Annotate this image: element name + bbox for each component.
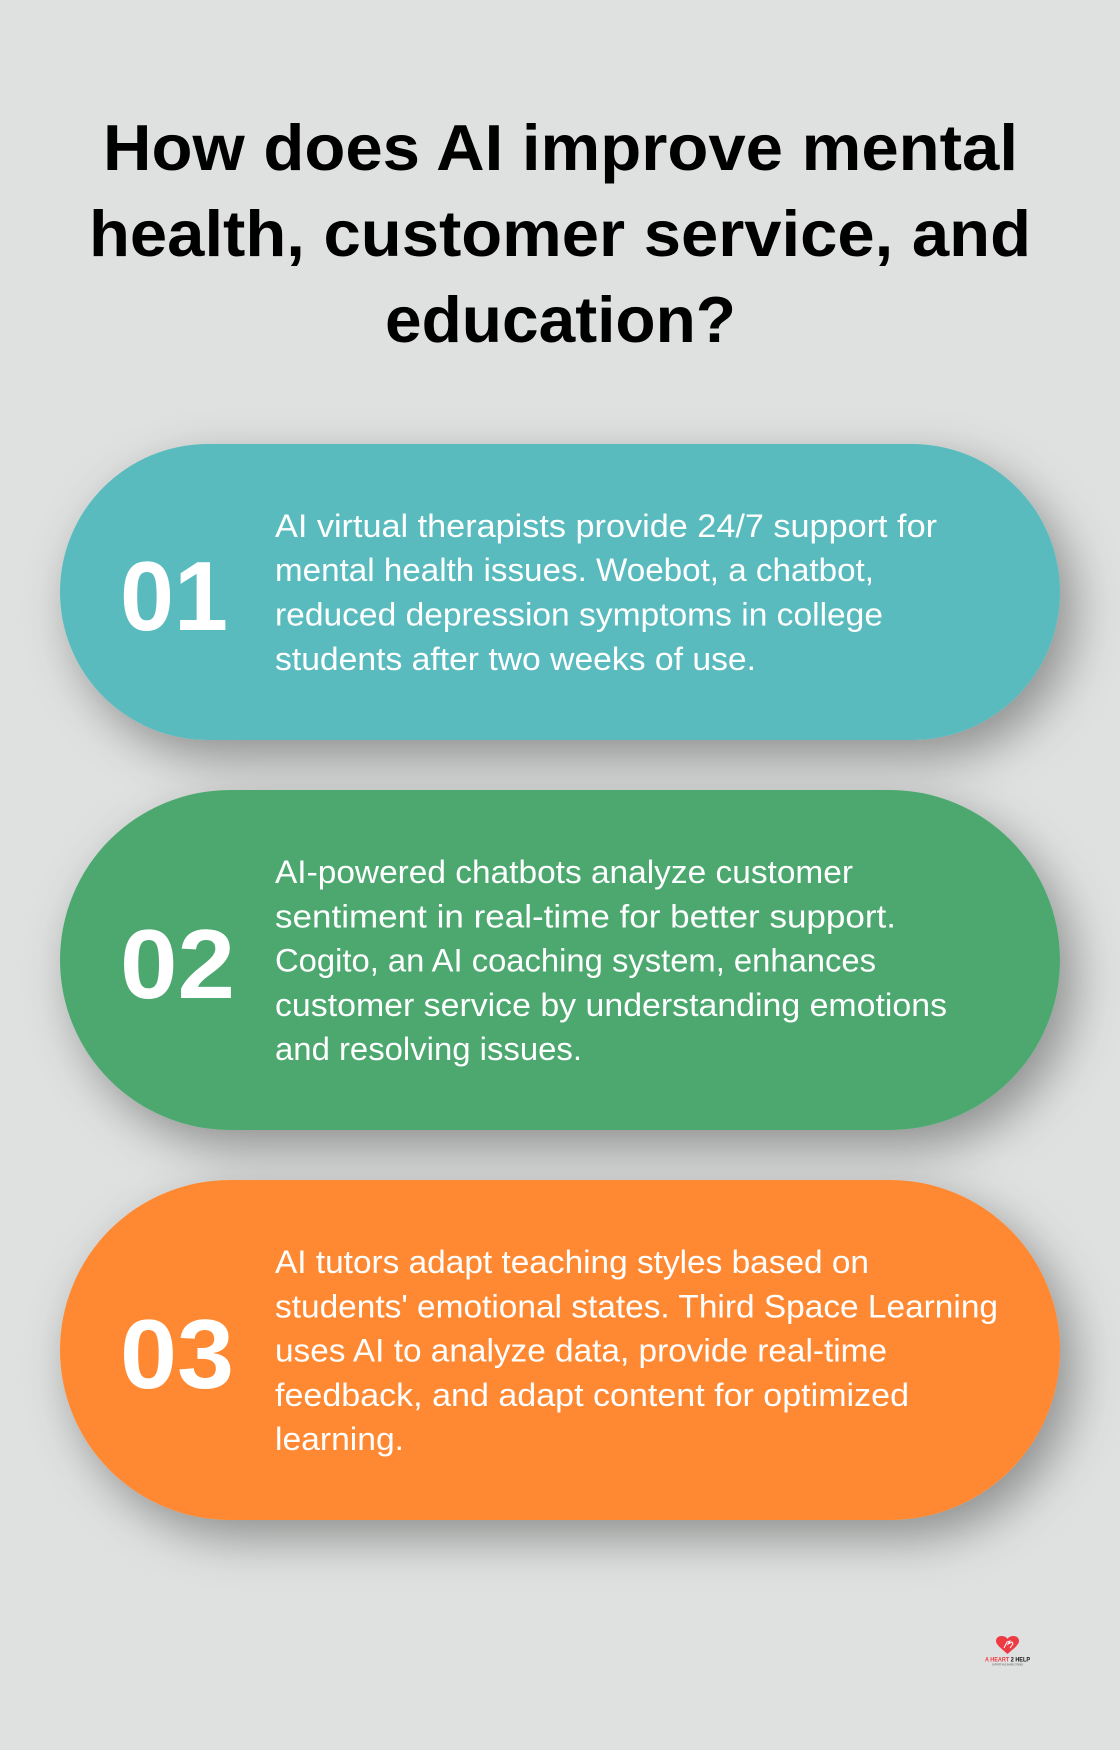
text block: customer service: AI-powered chatbots analyze customer — [275, 854, 853, 890]
text block: customer service: customer service by understanding emotions — [275, 987, 947, 1023]
text block: customer service: and resolving issues. — [275, 1031, 582, 1067]
number 02: 02 — [120, 909, 235, 1019]
number 01: 01 — [120, 541, 228, 651]
text block: customer service — [275, 854, 947, 1067]
number 03: 03 — [120, 1299, 234, 1409]
panel: 03 education — [60, 1180, 1060, 1520]
text block: mental health: mental health issues. Woebot, a chatbot, — [275, 552, 874, 588]
pill background teal — [60, 444, 1060, 740]
text block: mental health: reduced depression symptoms in college — [275, 596, 883, 632]
title: education? — [385, 283, 736, 356]
panel: 02 customer service — [60, 790, 1060, 1130]
text block: mental health: students after two weeks of use. — [275, 641, 756, 677]
title: health, customer service, and — [89, 197, 1031, 270]
text block: education: AI tutors adapt teaching styles based on — [275, 1244, 869, 1280]
text block: mental health: AI virtual therapists provide 24/7 support for — [275, 508, 937, 544]
title: How does AI improve mental — [103, 111, 1018, 184]
logo: A Heart 2 Help — [985, 1636, 1031, 1666]
text block: customer service: sentiment in real-time for better support. — [275, 898, 896, 934]
text block: education: learning. — [275, 1421, 404, 1457]
text block: education: students' emotional states. Third Space Learning — [275, 1288, 998, 1324]
icon: red heart with hand — [996, 1636, 1019, 1654]
text block: education: feedback, and adapt content for optimized — [275, 1377, 909, 1413]
text block: mental health — [275, 508, 937, 677]
text block: education: uses AI to analyze data, provide real-time — [275, 1332, 887, 1368]
logo wordmark: A HEART 2 HELP — [985, 1656, 1031, 1664]
text block: education — [275, 1244, 998, 1457]
text block: customer service: Cogito, an AI coaching system, enhances — [275, 942, 876, 978]
logo tagline: SUPPORT AND SHARE STORIES — [992, 1662, 1023, 1666]
title — [89, 111, 1031, 356]
pill background green — [60, 790, 1060, 1130]
panel: 01 mental health — [60, 444, 1060, 740]
pill background orange — [60, 1180, 1060, 1520]
